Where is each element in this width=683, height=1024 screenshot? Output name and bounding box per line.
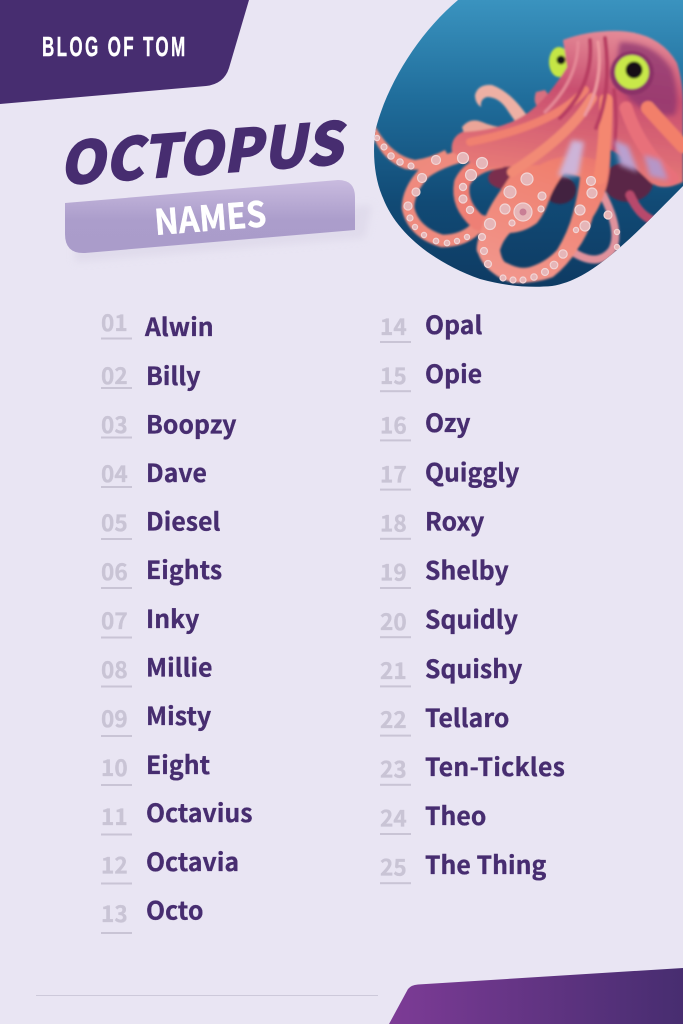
ribbon: names <box>65 180 372 262</box>
near eye <box>610 51 654 95</box>
name 23: Ten-Tickles <box>425 748 565 784</box>
suckers <box>374 135 620 283</box>
name 04: Dave <box>146 454 207 490</box>
name 06: 06 <box>101 554 128 587</box>
name 14: 14 <box>380 309 407 342</box>
name 03: Boopzy <box>146 405 237 441</box>
subtitle: NAMES <box>152 186 268 246</box>
name 11 <box>101 794 253 836</box>
name 09: Misty <box>146 697 211 733</box>
title: octopus: OCTOPUS <box>55 96 351 202</box>
main arm with loop <box>475 150 612 285</box>
name 12 <box>101 843 239 884</box>
name 15: 15 <box>380 358 407 391</box>
name 14: Opal <box>425 306 482 342</box>
name 17 <box>380 453 519 491</box>
name 19: 19 <box>380 555 407 588</box>
name 15 <box>380 355 482 392</box>
name 07: Inky <box>146 600 199 636</box>
name 20: Squidly <box>425 601 518 637</box>
name 25: The Thing <box>425 846 547 882</box>
name 13: 13 <box>101 896 128 929</box>
name 21 <box>380 650 522 687</box>
name 24 <box>380 797 486 835</box>
name 20: 20 <box>380 604 407 637</box>
name 06: Eights <box>146 551 222 587</box>
underside glow <box>558 140 668 180</box>
name 03: 03 <box>101 407 128 440</box>
name 07 <box>101 600 199 638</box>
name 02: 02 <box>101 358 128 391</box>
name 02: Billy <box>146 357 201 393</box>
name 05: 05 <box>101 505 128 538</box>
name 13 <box>101 892 204 934</box>
name 12: Octavia <box>146 843 239 879</box>
name 17: 17 <box>380 456 407 490</box>
name 01 <box>101 305 214 344</box>
name 24: 24 <box>380 800 407 834</box>
name 24: Theo <box>425 797 486 833</box>
far eye <box>549 47 569 77</box>
names list: left column <box>101 305 253 934</box>
name 08 <box>101 649 213 688</box>
name 11: 11 <box>101 799 128 832</box>
name 21: 21 <box>380 653 407 686</box>
name 08: Millie <box>146 649 213 685</box>
name 21: Squishy <box>425 650 522 686</box>
octopus illustration <box>370 0 683 290</box>
name 25 <box>380 846 547 884</box>
name 06 <box>101 551 222 589</box>
name 18: Roxy <box>425 502 484 538</box>
name 04: 04 <box>101 456 128 489</box>
left loop arms <box>408 152 500 241</box>
name 05: Diesel <box>146 503 221 539</box>
name 19 <box>380 552 509 589</box>
brand name: BLOG OF TOM <box>42 31 185 62</box>
name 04 <box>101 454 207 490</box>
name 16: Ozy <box>425 404 471 440</box>
name 22: Tellaro <box>425 699 510 735</box>
name 23: 23 <box>380 751 407 784</box>
name 09 <box>101 697 211 737</box>
name 02 <box>101 357 201 393</box>
name 19: Shelby <box>425 552 509 588</box>
name 10: Eight <box>146 746 210 782</box>
name 22: 22 <box>380 702 407 735</box>
name 22 <box>380 699 510 737</box>
name 03 <box>101 405 237 441</box>
name 09: 09 <box>101 701 128 734</box>
arm highlights <box>470 38 683 178</box>
name 07: 07 <box>101 603 128 636</box>
name 20 <box>380 601 518 638</box>
name 18: 18 <box>380 506 407 539</box>
name 18 <box>380 502 484 540</box>
footer shape <box>389 968 683 1024</box>
top banner <box>0 0 249 104</box>
name 14 <box>380 306 482 343</box>
name 25: 25 <box>380 850 407 883</box>
name 08: 08 <box>101 652 128 685</box>
back arms <box>373 85 658 260</box>
name 05 <box>101 503 221 540</box>
names list: right column <box>380 306 565 884</box>
name 10 <box>101 746 210 786</box>
name 17: Quiggly <box>425 453 519 489</box>
name 16: 16 <box>380 407 407 440</box>
name 01: 01 <box>101 305 128 338</box>
name 11: Octavius <box>146 794 253 830</box>
name 12: 12 <box>101 848 128 880</box>
name 01: Alwin <box>144 308 214 344</box>
name 10: 10 <box>101 750 128 783</box>
name 15: Opie <box>425 355 482 391</box>
name 16 <box>380 404 471 441</box>
mantle and head <box>452 31 683 187</box>
name 13: Octo <box>146 892 204 928</box>
